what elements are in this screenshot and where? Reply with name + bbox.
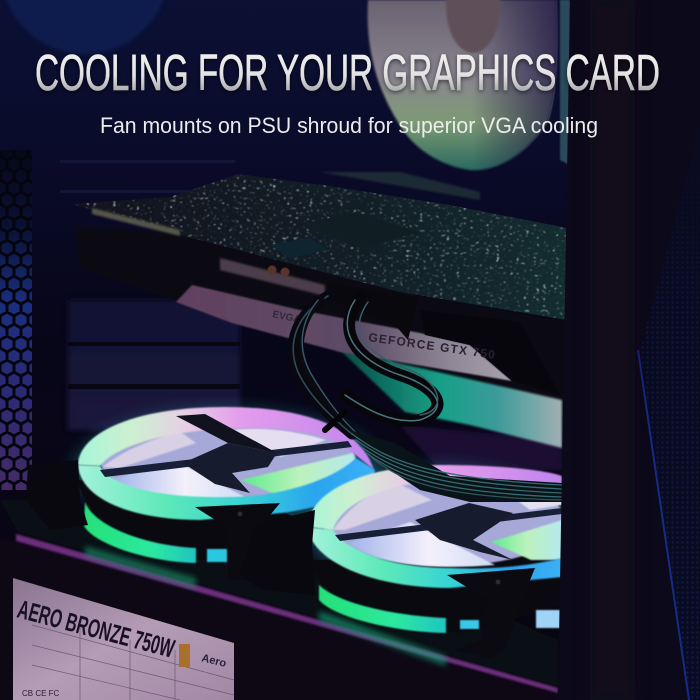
- dark frame fan one: [78, 480, 320, 561]
- ring fan two: [308, 465, 562, 530]
- cyan gap fan one: [207, 549, 227, 562]
- inner disc fan two: [323, 478, 567, 566]
- graphics card pcb: [72, 172, 567, 322]
- right blade fan two: [491, 520, 562, 560]
- lower ring glow fan one: [84, 502, 196, 563]
- shroud front: [0, 534, 558, 700]
- magenta edge: [16, 534, 558, 693]
- shroud surface: [0, 500, 558, 686]
- top left blade fan two: [333, 482, 432, 530]
- hub fan two: [415, 503, 513, 560]
- fan two: [308, 465, 567, 658]
- fan glow one: [73, 408, 383, 532]
- upper back rail: [320, 172, 480, 200]
- io bracket: [220, 258, 325, 296]
- expansion slots: [60, 160, 240, 430]
- corner bracket fan two: [447, 568, 535, 658]
- panel shade: [590, 0, 635, 700]
- power cables: [293, 282, 562, 502]
- fan one: [78, 407, 375, 580]
- zip tie: [325, 412, 345, 430]
- brand text: EVGA: [271, 309, 301, 326]
- top right blade fan one: [232, 429, 326, 457]
- fan hub: [446, 0, 500, 53]
- frame bracket between fans: [240, 510, 315, 595]
- fan glow two: [305, 465, 575, 595]
- inner disc fan one: [100, 416, 356, 504]
- side mesh: [640, 130, 700, 700]
- top right blade fan two: [510, 486, 562, 510]
- cyan gap fan two: [460, 620, 479, 629]
- lower ring glow fan two: [319, 585, 446, 633]
- subtitle: Fan mounts on PSU shroud for superior VGA cooling: [100, 113, 598, 138]
- top RGB fan: [368, 0, 557, 170]
- bottom left blade fan two: [348, 522, 495, 567]
- dark frame fan two: [308, 555, 562, 632]
- graphics card lower body: [75, 226, 567, 420]
- hub fan one: [183, 443, 277, 493]
- bottom right blade fan one: [241, 453, 357, 495]
- dim purple board below card: [400, 425, 562, 470]
- connector: [327, 282, 418, 340]
- green reflection: [85, 546, 196, 588]
- light strip beside top fan: [560, 0, 570, 165]
- psu model name: AERO BRONZE 750W: [14, 594, 178, 664]
- certification marks: CB CE FC: [22, 689, 60, 698]
- teal cooler panel: [340, 350, 562, 448]
- psu label: [13, 578, 234, 700]
- edge connector: [92, 208, 180, 236]
- top left blade fan one: [103, 430, 196, 468]
- top left case fan: [1, 0, 169, 54]
- bronze badge: [179, 644, 190, 667]
- mesh fade: [640, 130, 700, 700]
- gpu model text: GEFORCE GTX 750: [368, 330, 497, 362]
- right case panel: [558, 0, 700, 700]
- struts fan two: [335, 508, 562, 541]
- brand mark: Aero: [200, 652, 228, 670]
- flat ribbon: [350, 430, 562, 502]
- panel blue edge: [638, 350, 689, 700]
- left mesh panel: [0, 150, 32, 490]
- fan frame left: [26, 460, 88, 530]
- struts fan one: [100, 441, 352, 477]
- gpu chip: [300, 212, 420, 248]
- corner bracket fan one: [195, 503, 280, 580]
- memory chips: [270, 238, 328, 258]
- bottom left blade fan one: [112, 462, 245, 498]
- pale gap fan two: [536, 610, 560, 628]
- spec table: [32, 620, 234, 700]
- card backplate: [176, 285, 560, 395]
- ring fan one: [78, 407, 374, 470]
